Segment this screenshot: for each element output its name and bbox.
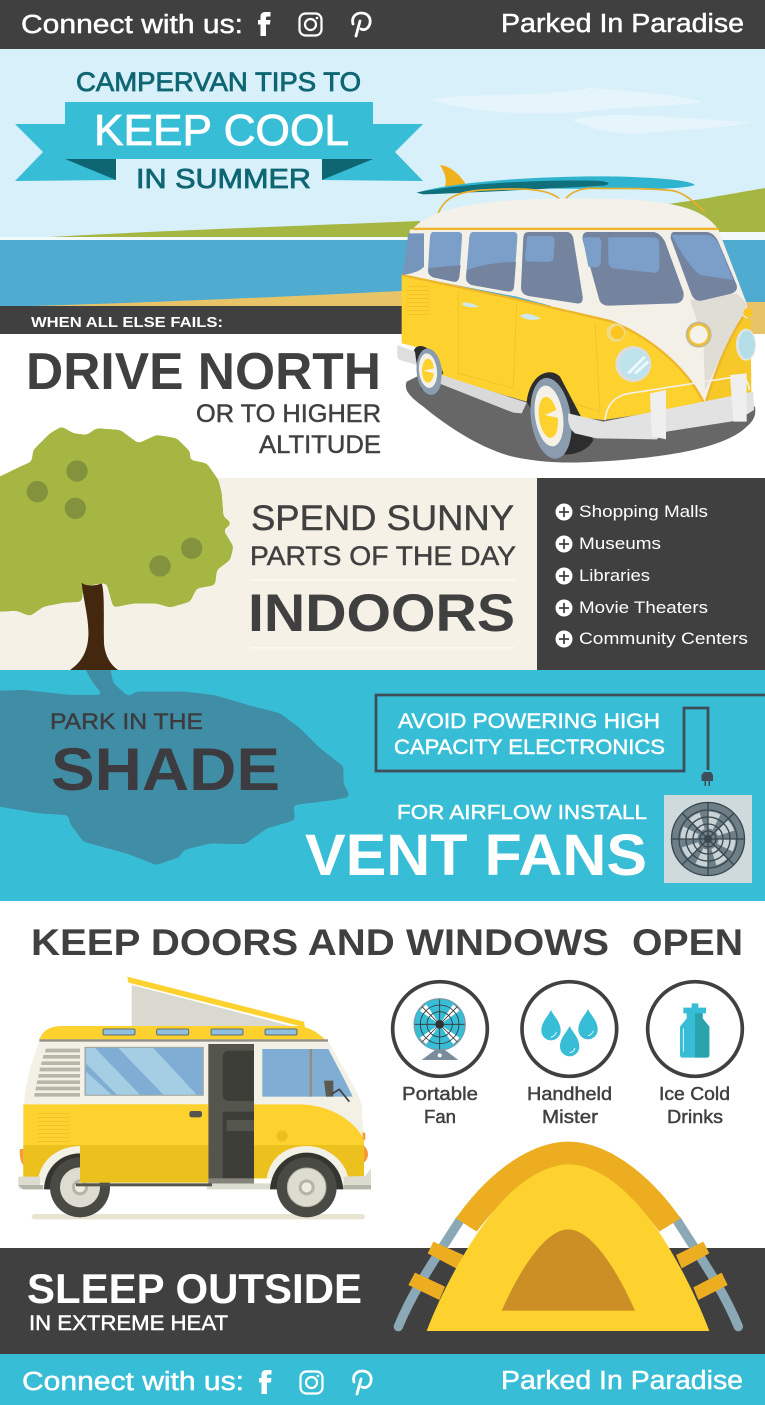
wheels <box>414 346 593 461</box>
icon: plug <box>702 772 713 786</box>
callout: avoid powering high capacity electronics: CAPACITY ELECTRONICS <box>394 736 665 759</box>
panel: drive north <box>0 334 765 478</box>
door <box>76 1044 288 1186</box>
header bar <box>0 0 765 49</box>
panel: indoor places list: Libraries <box>579 567 650 585</box>
icon labels: Handheld <box>527 1084 612 1104</box>
panel: sleep outside: IN EXTREME HEAT <box>29 1312 228 1335</box>
callout: avoid powering high capacity electronics <box>376 695 765 786</box>
footer bar: Parked In Paradise <box>501 1367 743 1395</box>
header bar: Connect with us: <box>21 11 243 39</box>
sand patch behind van <box>730 302 765 334</box>
panel: drive north: DRIVE NORTH <box>26 343 381 401</box>
panel: sleep outside: SLEEP OUTSIDE <box>27 1265 362 1312</box>
footer bar <box>0 1354 765 1405</box>
illustration: VW campervan <box>397 165 756 463</box>
icon labels: Ice Cold <box>659 1084 730 1104</box>
band: when all else fails: WHEN ALL ELSE FAILS: <box>31 314 223 331</box>
panel: drive north: ALTITUDE <box>259 431 381 459</box>
illustration: side-view camper with pop top <box>18 977 371 1219</box>
panel: indoor places list: Community Centers <box>579 630 748 648</box>
panel: indoor places list <box>537 478 765 670</box>
tree shadow <box>0 653 350 865</box>
title <box>15 67 423 194</box>
panel: indoor places list: Movie Theaters <box>579 599 708 617</box>
illustration: tree <box>0 427 233 670</box>
callout: avoid powering high capacity electronics: AVOID POWERING HIGH <box>398 710 660 733</box>
icon labels: Portable <box>402 1084 478 1104</box>
panel: spend sunny parts of the day indoors: INDOORS <box>248 584 515 643</box>
wheels <box>50 1157 337 1217</box>
panel: keep doors and windows open <box>0 901 765 1248</box>
icon: drink bottle <box>648 982 742 1076</box>
illustration: tent <box>398 1142 738 1331</box>
ribbon banner <box>15 102 423 181</box>
title: CAMPERVAN TIPS TO <box>76 67 361 97</box>
heading: park in the shade: PARK IN THE <box>50 709 203 734</box>
icon labels: Mister <box>542 1107 598 1127</box>
heading: vent fans: FOR AIRFLOW INSTALL <box>397 801 647 824</box>
side windows <box>403 232 737 306</box>
panel: drive north: OR TO HIGHER <box>196 400 381 428</box>
scene: sky, hills, sea and beach <box>0 49 765 334</box>
footer bar: Connect with us: <box>22 1368 244 1396</box>
icon labels: Fan <box>424 1107 456 1127</box>
icon: vent fan <box>664 795 752 883</box>
title: KEEP COOL <box>94 106 349 155</box>
title: IN SUMMER <box>136 163 311 194</box>
panel: spend sunny parts of the day indoors: PARTS OF THE DAY <box>250 541 516 571</box>
header bar: Parked In Paradise <box>501 10 744 38</box>
heading: park in the shade <box>50 709 280 803</box>
icon labels: Drinks <box>667 1107 723 1127</box>
panel: keep doors and windows open: OPEN <box>632 922 743 963</box>
panel: spend sunny parts of the day indoors: SPEND SUNNY <box>251 499 514 538</box>
panel: teal shade section background <box>0 670 765 901</box>
windows <box>85 1047 353 1102</box>
icon: portable fan <box>393 982 487 1076</box>
panel: sleep outside <box>0 1248 765 1354</box>
heading: park in the shade: SHADE <box>51 736 280 803</box>
panel: spend sunny parts of the day indoors <box>0 478 537 670</box>
band: when all else fails <box>0 306 410 334</box>
panel: keep doors and windows open: KEEP DOORS AND WINDOWS <box>31 922 609 963</box>
bumpers <box>397 345 754 439</box>
panel: indoor places list: Museums <box>579 535 661 553</box>
icon labels <box>402 1084 730 1127</box>
panel: indoor places list: Shopping Malls <box>579 503 708 521</box>
heading: vent fans: VENT FANS <box>305 823 647 888</box>
icon: water drops <box>522 982 617 1076</box>
